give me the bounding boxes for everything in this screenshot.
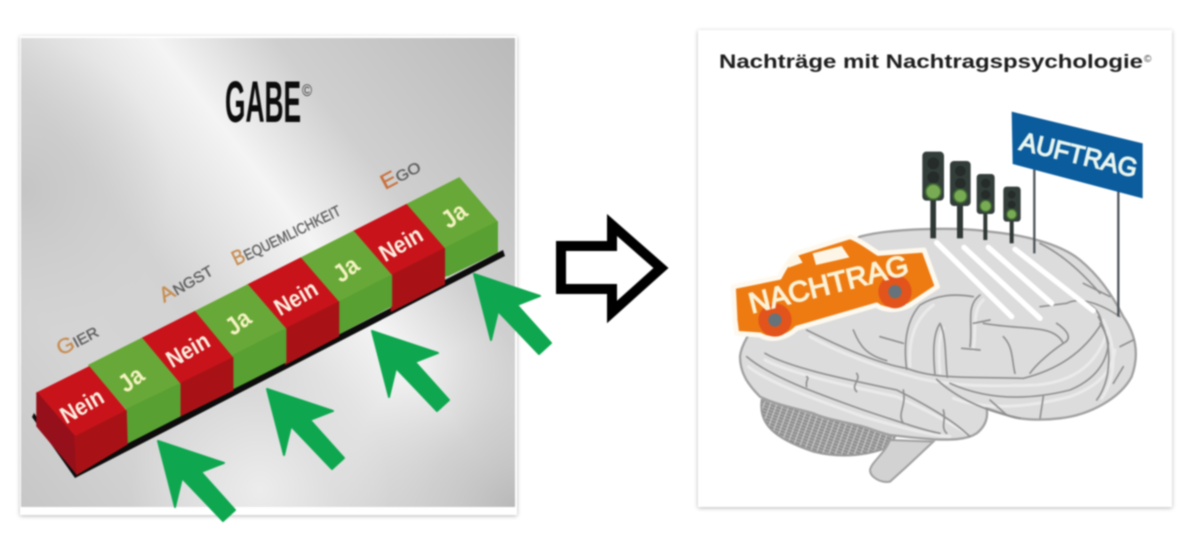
block: Nein 4 — [353, 205, 444, 311]
block: Ja 2: Ja — [220, 303, 257, 341]
block: Nein 1 — [37, 367, 127, 474]
block: Nein 4: Nein — [375, 221, 428, 268]
traffic light 2 — [950, 161, 971, 238]
car: NACHTRAG — [733, 237, 937, 338]
block: Ja 3 — [300, 232, 391, 334]
car windows — [787, 246, 849, 268]
heading: Nachträge mit Nachtragspsychologie: Nachträge mit Nachtragspsychologie — [719, 52, 1143, 73]
block: Ja 4 — [406, 178, 497, 276]
block: Nein 2: Nein — [162, 327, 215, 374]
wheel rear — [758, 303, 792, 337]
switch row — [37, 178, 497, 474]
block: Nein 3: Nein — [270, 275, 323, 322]
label: Angst: ANGST — [155, 258, 217, 307]
illustration: brain — [733, 112, 1143, 482]
green arrow 1 — [158, 441, 235, 521]
block: Ja 1 — [89, 338, 180, 443]
label: Bequemlichkeit: BEQUEMLICHKEIT — [228, 198, 344, 270]
copyright mark: © — [302, 81, 312, 100]
brain stem — [870, 440, 933, 482]
sign: AUFTRAG: AUFTRAG — [1017, 126, 1141, 183]
block: Nein 1: Nein — [56, 383, 109, 430]
block: Nein 3 — [248, 258, 338, 364]
block: Ja 1: Ja — [113, 360, 150, 398]
panel: GABE — [20, 36, 551, 521]
sign: AUFTRAG — [1012, 112, 1143, 198]
green arrow 2 — [267, 389, 344, 469]
traffic light 4 — [1003, 187, 1021, 243]
green arrow 4 — [474, 274, 551, 354]
road stripes — [937, 243, 1093, 318]
brain folds — [747, 243, 1133, 437]
label: Gier: GIER — [53, 319, 102, 360]
block: Ja 4: Ja — [436, 196, 473, 234]
sign poles — [1034, 168, 1118, 317]
cerebellum — [761, 400, 897, 455]
cerebrum outline — [740, 229, 1136, 440]
big outline arrow — [561, 225, 661, 312]
wheel front — [878, 275, 912, 308]
traffic light 3 — [977, 174, 995, 240]
green arrow 3 — [372, 331, 449, 411]
black base — [32, 250, 505, 478]
traffic light 1 — [922, 152, 944, 238]
block: Nein 2 — [142, 312, 233, 416]
panel: GABE: GABE — [225, 70, 301, 135]
copyright mark: © — [1144, 54, 1152, 65]
block: Ja 2 — [195, 285, 286, 388]
block: Ja 3: Ja — [328, 250, 365, 288]
car label: NACHTRAG — [746, 250, 912, 320]
label: Ego: EGO — [377, 154, 424, 194]
fold highlights — [748, 300, 1115, 437]
panel: Nachträge — [698, 30, 1172, 507]
